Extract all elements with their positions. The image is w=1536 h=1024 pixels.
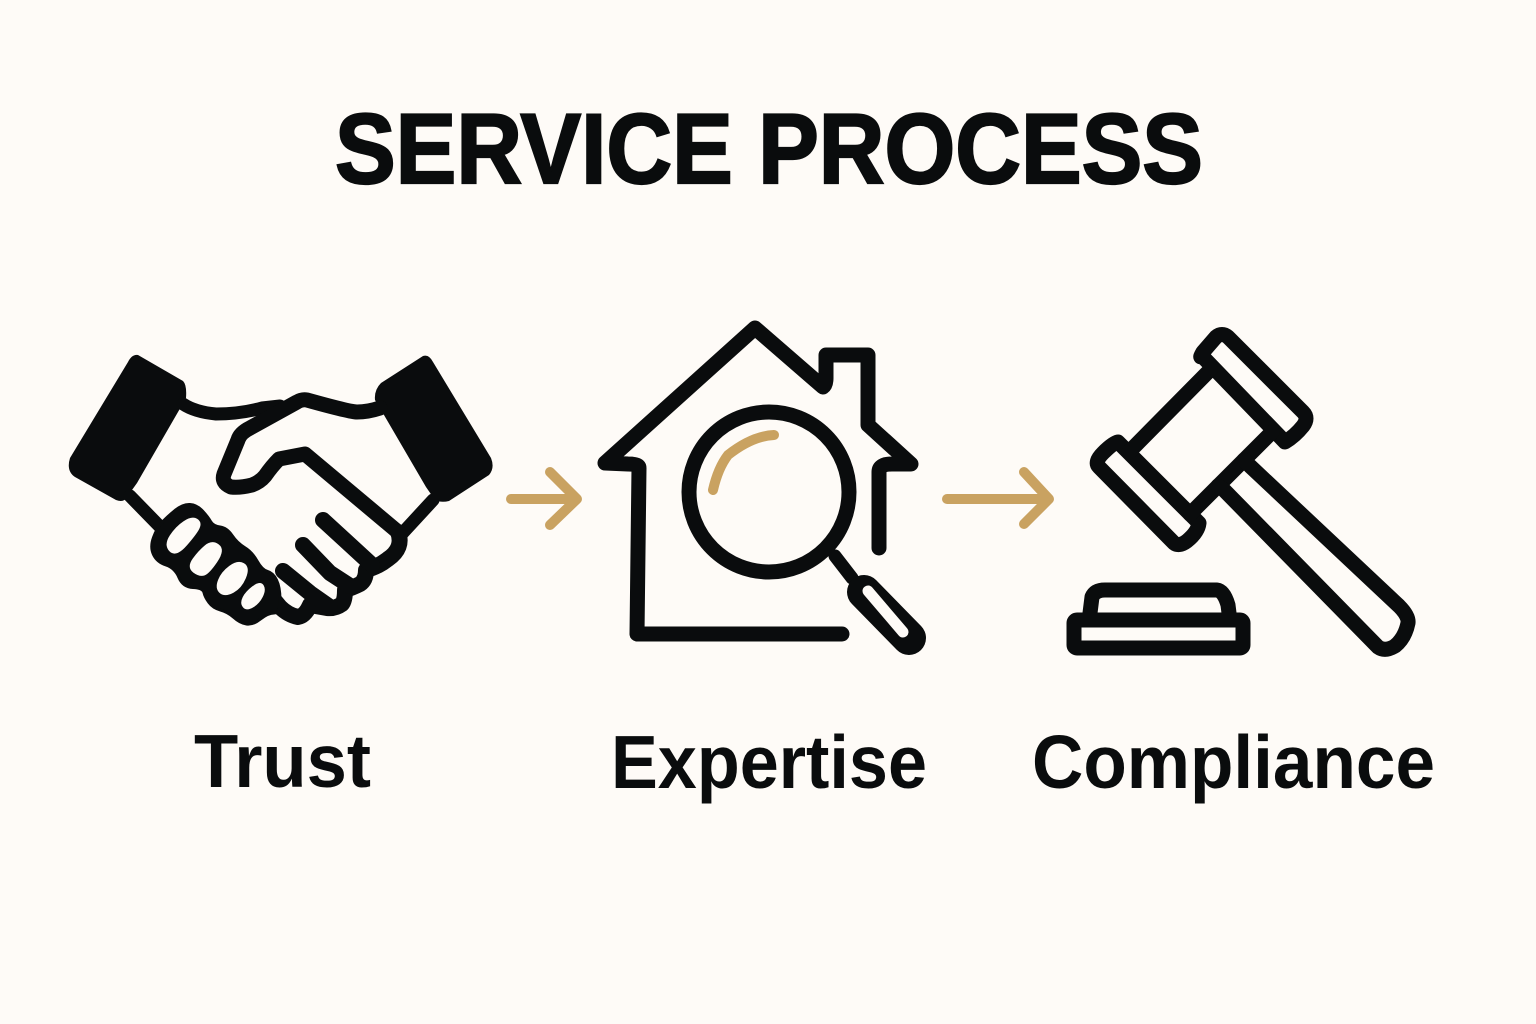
house outline bbox=[605, 328, 911, 634]
left hand knuckles silhouette bbox=[152, 504, 280, 624]
right cuff bbox=[375, 356, 493, 502]
right hand lower outline bbox=[270, 532, 400, 617]
icon: handshake (Trust) bbox=[69, 355, 493, 624]
icon: gavel (Compliance) bbox=[1074, 334, 1408, 649]
sound block base bbox=[1074, 620, 1243, 648]
handle neck bbox=[835, 556, 852, 578]
gavel bottom cap bbox=[1097, 442, 1199, 545]
gavel body bbox=[1129, 370, 1272, 514]
icon: house with magnifying glass (Expertise) bbox=[605, 328, 911, 638]
gavel top cap bbox=[1201, 334, 1306, 442]
right hand outline with thumb bbox=[223, 400, 398, 532]
arrow 1 bbox=[511, 472, 577, 525]
left cuff bbox=[69, 355, 186, 501]
lens highlight bbox=[713, 435, 774, 490]
knuckle gaps bbox=[169, 520, 263, 607]
gavel handle bbox=[1218, 460, 1408, 649]
label: Trust: Trust bbox=[194, 719, 371, 803]
title: SERVICE PROCESS bbox=[335, 93, 1203, 204]
finger lines bbox=[323, 520, 372, 565]
right wrist line bbox=[398, 500, 433, 538]
handle bbox=[864, 592, 909, 638]
label: Compliance: Compliance bbox=[1032, 720, 1435, 804]
sound block top bbox=[1090, 590, 1229, 613]
left wrist and forearm lines bbox=[183, 404, 280, 414]
label: Expertise: Expertise bbox=[611, 720, 927, 804]
arrow 2 bbox=[947, 472, 1049, 524]
lens bbox=[689, 412, 849, 572]
